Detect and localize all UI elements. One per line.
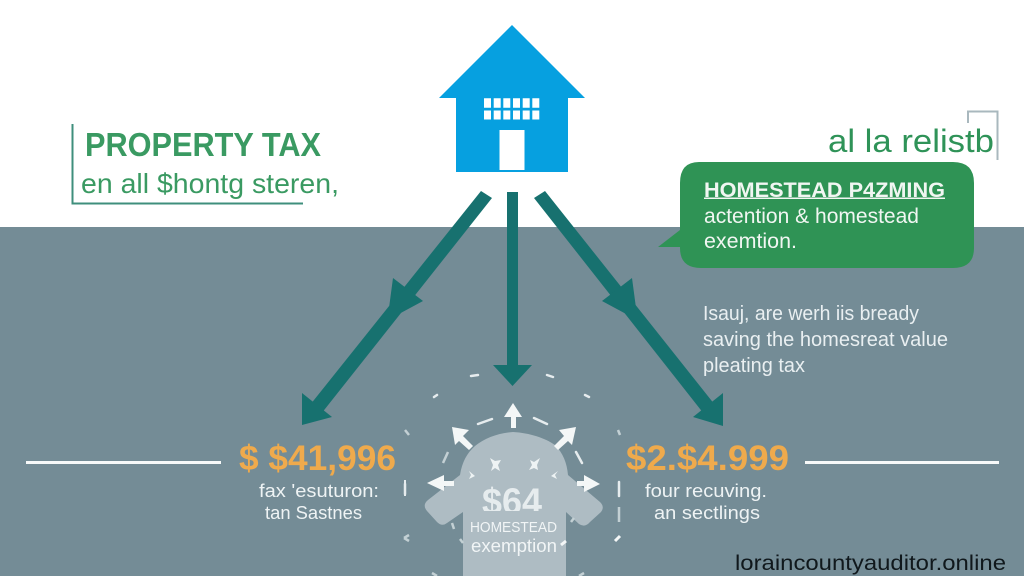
amount: $64 [482, 481, 542, 522]
callout: homestead green bubble: exemtion. [704, 230, 797, 253]
faint ring marks [404, 430, 620, 576]
heading: top right label: al la relistb [828, 123, 994, 159]
callout: homestead green bubble: actention & homestead [704, 205, 919, 228]
text block: right description: saving the homesreat value [703, 329, 948, 351]
text block: right description: pleating tax [703, 355, 805, 377]
watermark: site url: loraincountyauditor.online [735, 552, 1006, 575]
heading: top right label [828, 112, 998, 160]
right statistic: four recuving. [645, 481, 767, 501]
figure: homestead person with radiating arrows [404, 375, 620, 576]
arrow: center [493, 192, 532, 386]
left statistic: fax 'esuturon: [259, 481, 379, 501]
callout: homestead green bubble: HOMESTEAD P4ZMING [704, 179, 945, 202]
radiating arrows [427, 403, 600, 492]
figure: homestead person with radiating arrows: exemption [471, 536, 557, 556]
text block: right description [703, 303, 948, 377]
white ring marks [561, 536, 620, 545]
right statistic [626, 439, 999, 523]
dashed ring [405, 375, 619, 496]
callout: homestead green bubble [658, 162, 974, 268]
arrow: right [534, 191, 723, 426]
heading: property tax block [72, 124, 339, 204]
sparkles [469, 458, 558, 479]
figure: homestead person with radiating arrows: HOMESTEAD [470, 519, 557, 536]
right statistic: an sectlings [654, 503, 760, 523]
arrow: left [302, 191, 492, 425]
left statistic [26, 439, 406, 523]
icon: blue house [439, 25, 585, 172]
background: white upper area [0, 0, 1024, 227]
background: slate lower panel [0, 227, 1024, 576]
heading: property tax block: PROPERTY TAX [85, 126, 321, 163]
left statistic: tan Sastnes [265, 503, 362, 523]
text block: right description: Isauj, are werh iis bready [703, 303, 919, 325]
left statistic: $ $41,996 [239, 439, 396, 478]
heading: property tax block: en all $hontg steren, [81, 168, 339, 199]
right statistic: $2.$4.999 [626, 439, 789, 478]
